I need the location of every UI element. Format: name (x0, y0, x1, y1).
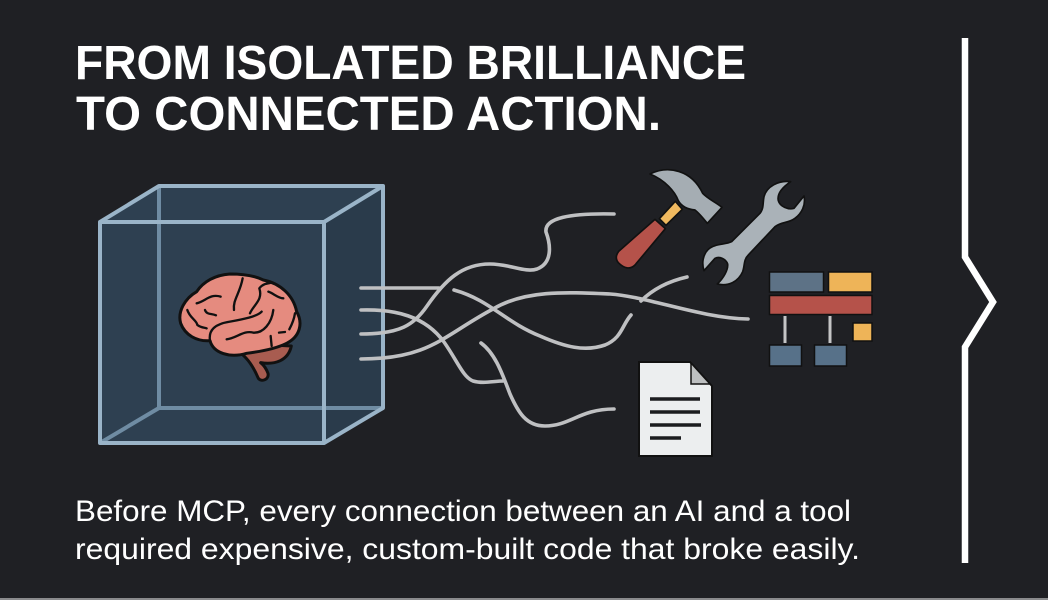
body text: required expensive, custom-built code that broke easily. (75, 533, 860, 566)
box front edges (100, 186, 383, 443)
tangled connection wires (361, 214, 748, 426)
body text (75, 495, 860, 566)
box faces (100, 186, 383, 443)
chevron divider (965, 38, 993, 563)
title (75, 37, 746, 141)
icon: wrench (703, 181, 804, 285)
icon: hammer (616, 170, 722, 268)
title: TO CONNECTED ACTION. (76, 88, 661, 141)
title: FROM ISOLATED BRILLIANCE (75, 37, 746, 90)
icon: brain (180, 274, 300, 380)
icon: document (639, 362, 712, 456)
icon: database schema diagram (770, 272, 872, 366)
glass box containing brain (100, 186, 383, 443)
body text: Before MCP, every connection between an AI and a tool (75, 495, 851, 528)
box back edges (100, 186, 383, 443)
